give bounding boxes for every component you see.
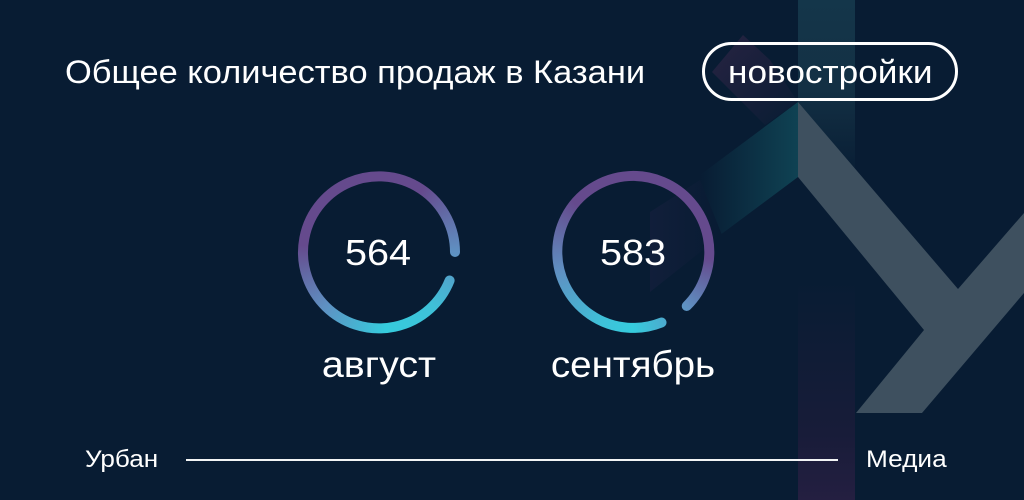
value: 564: 564 bbox=[345, 232, 411, 273]
footer line bbox=[186, 459, 838, 461]
value: 583: 583 bbox=[600, 232, 666, 273]
title: Общее количество продаж в Казани bbox=[65, 54, 645, 90]
badge label: новостройки bbox=[728, 54, 932, 90]
badge: новостройки bbox=[702, 42, 958, 101]
chart: ring charts bbox=[298, 170, 714, 334]
label: сентябрь: сентябрь bbox=[551, 344, 715, 385]
ring: сентябрь bbox=[552, 170, 714, 333]
footer: Урбан: Урбан bbox=[85, 446, 158, 473]
ring: август bbox=[298, 171, 460, 334]
footer: Медиа: Медиа bbox=[866, 446, 947, 473]
label: август: август bbox=[322, 344, 436, 385]
